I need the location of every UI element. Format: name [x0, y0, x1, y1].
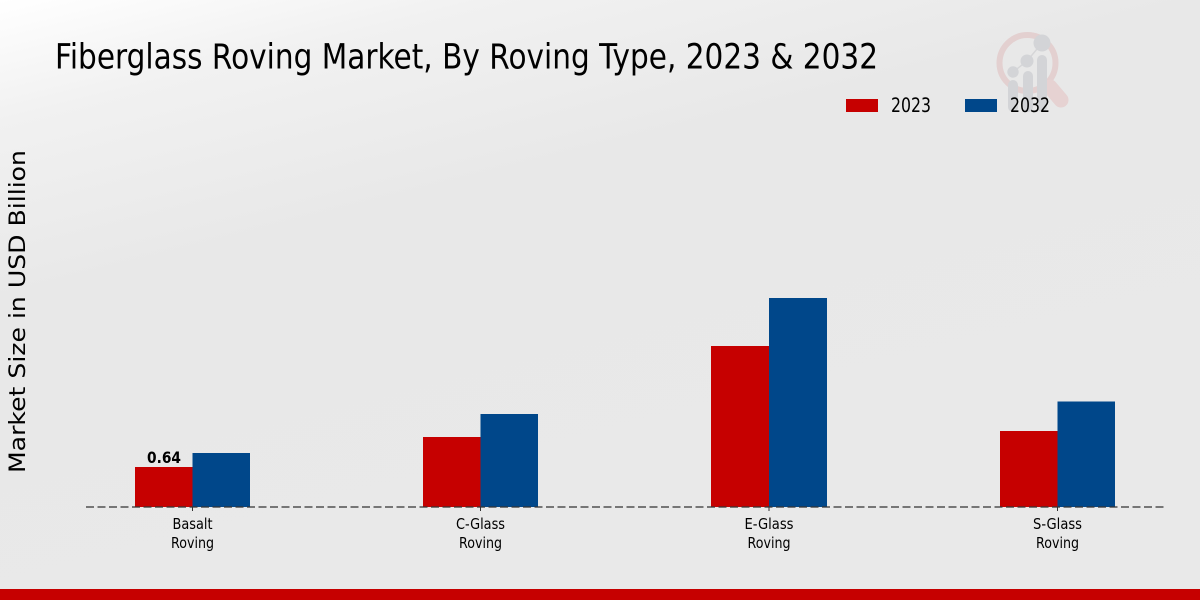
x-axis baseline	[86, 507, 1164, 511]
x label: S-Glass Roving: S-Glass	[1033, 515, 1082, 533]
bars: S-Glass Roving	[1000, 402, 1115, 507]
title: Fiberglass Roving Market, By Roving Type, 2023 & 2032	[55, 38, 878, 78]
x label: C-Glass Roving: C-Glass	[456, 515, 505, 533]
y-axis label: Market Size in USD Billion	[5, 150, 31, 473]
footer bar	[0, 589, 1200, 600]
x label: C-Glass Roving	[456, 515, 505, 552]
x label: S-Glass Roving	[1033, 515, 1082, 552]
x label: E-Glass Roving: E-Glass	[744, 515, 794, 533]
bars: E-Glass Roving	[711, 298, 827, 507]
legend item: 2032	[965, 94, 1050, 117]
value label: 0.64: 0.64	[147, 448, 181, 467]
icon: watermark logo	[1000, 34, 1061, 112]
legend item: 2032: 2032	[1010, 94, 1050, 117]
x label: S-Glass Roving: Roving	[1036, 534, 1079, 552]
x label: E-Glass Roving	[744, 515, 794, 552]
bar chart	[86, 298, 1164, 511]
bars: C-Glass Roving	[423, 414, 538, 507]
legend item: 2023: 2023	[891, 94, 931, 117]
x label: Basalt Roving	[171, 515, 214, 552]
x label: Basalt Roving: Roving	[171, 534, 214, 552]
x label: Basalt Roving: Basalt	[172, 515, 212, 533]
x label: E-Glass Roving: Roving	[748, 534, 790, 552]
bars: Basalt Roving	[135, 453, 250, 507]
legend	[846, 94, 1050, 117]
x label: C-Glass Roving: Roving	[459, 534, 502, 552]
legend item: 2023	[846, 94, 931, 117]
